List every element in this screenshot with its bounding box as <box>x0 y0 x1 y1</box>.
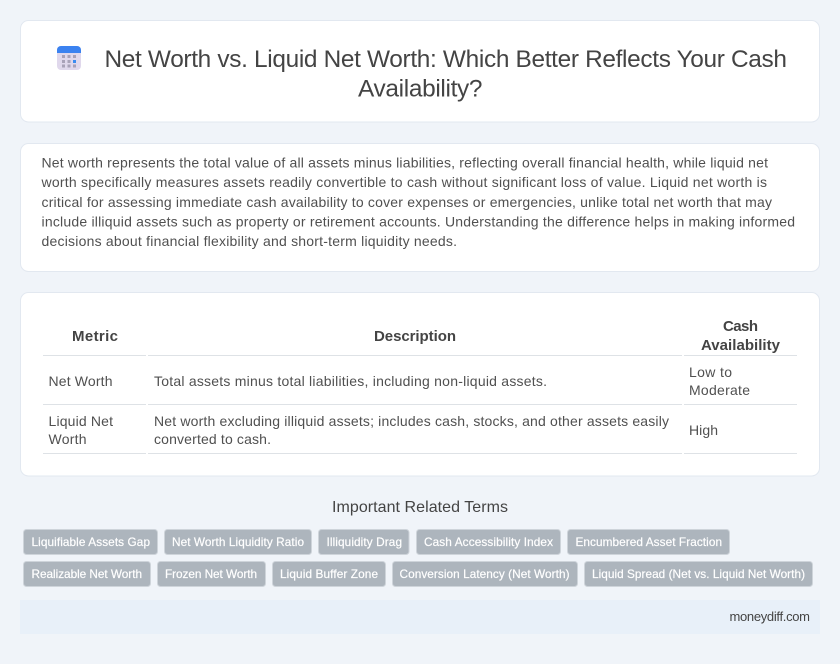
tag: Frozen Net Worth: Frozen Net Worth <box>165 567 257 581</box>
table row: liquid net worth: High <box>689 422 718 438</box>
tag: Net Worth Liquidity Ratio <box>164 530 312 554</box>
icon: calendar <box>57 46 81 70</box>
tag: Realizable Net Worth: Realizable Net Worth <box>32 567 142 581</box>
tag: Cash Accessibility Index <box>416 530 560 554</box>
tag: Conversion Latency (Net Worth): Conversion Latency (Net Worth) <box>400 567 570 581</box>
tag: Net Worth Liquidity Ratio: Net Worth Liquidity Ratio <box>172 535 304 549</box>
tag: Liquid Spread (Net vs. Liquid Net Worth): Liquid Spread (Net vs. Liquid Net Worth) <box>592 567 805 581</box>
tag: Encumbered Asset Fraction: Encumbered Asset Fraction <box>576 535 722 549</box>
table row: liquid net worth: Worth <box>48 431 86 447</box>
table header row: Description <box>374 328 456 345</box>
summary paragraph <box>40 154 795 249</box>
title: Availability? <box>358 76 482 102</box>
panel: comparison table <box>20 292 820 476</box>
summary paragraph: critical for assessing immediate cash availability to cover expenses or emergencies, unlike total net worth that may <box>42 194 772 210</box>
table row: liquid net worth: converted to cash. <box>154 431 271 447</box>
tag: Encumbered Asset Fraction <box>568 530 730 554</box>
summary paragraph: worth specifically measures assets readily convertible to cash without significant loss of value. Liquid net worth is <box>40 174 767 190</box>
table row: net worth: Net Worth <box>48 373 112 389</box>
table row: net worth <box>48 364 750 398</box>
footer source text: moneydiff.com <box>730 609 810 624</box>
panel: summary text <box>20 144 820 272</box>
summary paragraph: include illiquid assets such as property or retirement accounts. Understanding the difference helps in making informed <box>42 214 795 230</box>
tag: Liquid Buffer Zone <box>272 562 386 586</box>
table row: liquid net worth <box>48 413 718 447</box>
title <box>104 46 787 102</box>
summary paragraph: Net worth represents the total value of all assets minus liabilities, reflecting overall financial health, while liquid net <box>42 154 768 170</box>
footer <box>20 600 820 634</box>
table header row: Metric <box>72 328 118 345</box>
tag: Illiquidity Drag: Illiquidity Drag <box>326 535 402 549</box>
table row: net worth: Total assets minus total liabilities, including non-liquid assets. <box>154 373 547 389</box>
tag: Liquifiable Assets Gap: Liquifiable Assets Gap <box>32 535 150 549</box>
tag: Frozen Net Worth <box>158 562 266 586</box>
tag: Cash Accessibility Index: Cash Accessibility Index <box>424 535 553 549</box>
table header row: Cash <box>723 318 758 335</box>
table header row <box>72 318 781 354</box>
title: Net Worth vs. Liquid Net Worth: Which Better Reflects Your Cash <box>104 46 787 73</box>
table row: net worth: Moderate <box>689 382 750 398</box>
panel: header <box>20 20 820 122</box>
summary paragraph: decisions about financial flexibility and short-term liquidity needs. <box>42 233 457 249</box>
table row: liquid net worth: Liquid Net <box>48 413 113 429</box>
tag: Liquifiable Assets Gap <box>24 530 158 554</box>
tag: Illiquidity Drag <box>318 530 409 554</box>
heading: related terms: Important Related Terms <box>332 499 508 516</box>
tag: Conversion Latency (Net Worth) <box>392 562 578 586</box>
table header row: Availability <box>701 337 781 354</box>
table row: net worth: Low to <box>689 364 732 380</box>
tag: Liquid Buffer Zone: Liquid Buffer Zone <box>280 567 378 581</box>
tag: Liquid Spread (Net vs. Liquid Net Worth) <box>584 562 812 586</box>
table row: liquid net worth: Net worth excluding illiquid assets; includes cash, stocks, and other assets easily <box>154 413 669 429</box>
related term tags <box>24 530 812 586</box>
tag: Realizable Net Worth <box>24 562 150 586</box>
